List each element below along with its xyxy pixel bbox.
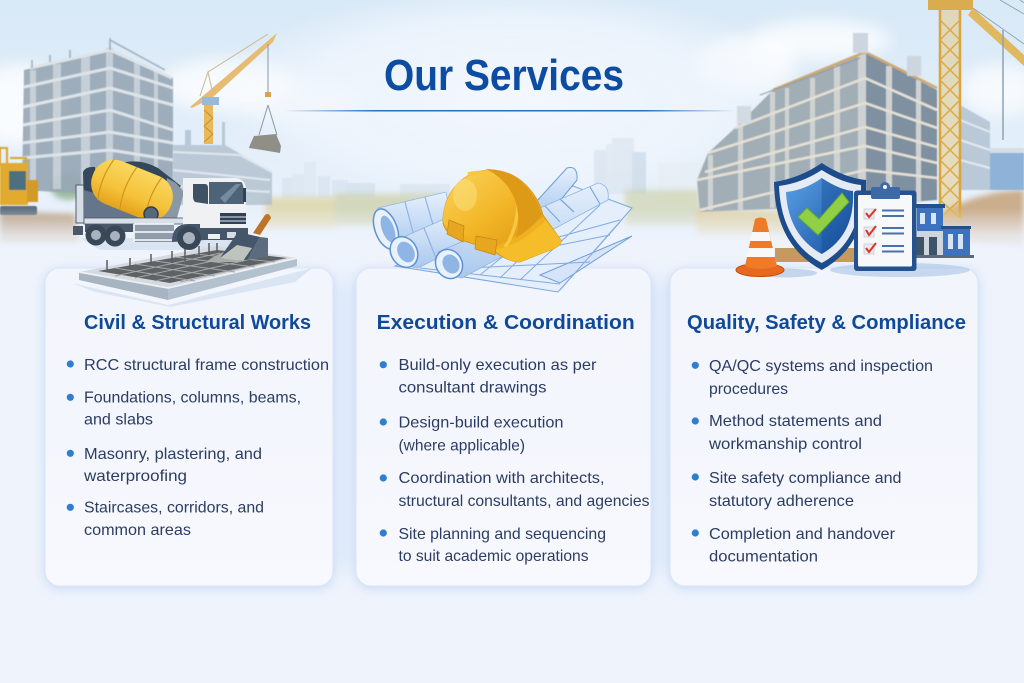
bullet list: Foundations, columns, beams, (84, 390, 301, 407)
page lower tint (0, 252, 1024, 683)
bullet list: Completion and handover (709, 526, 896, 543)
icon: rebar foundation slab with shovel (72, 214, 312, 307)
gap tint between cards (335, 280, 670, 570)
panel: Quality, Safety & Compliance (670, 268, 978, 586)
icon: traffic cone (736, 218, 817, 278)
heading: Quality, Safety & Compliance (687, 312, 966, 334)
bullet list: workmanship control (708, 436, 862, 453)
bullet list: Staircases, corridors, and (84, 500, 264, 517)
panel: Execution & Coordination (356, 268, 651, 586)
roll far top (535, 168, 577, 218)
clouds (0, 20, 1024, 145)
icon: concrete mixer truck (73, 153, 262, 250)
bullet list: Coordination with architects, (398, 470, 604, 487)
distant skyline (282, 138, 706, 203)
tower crane: left (190, 33, 281, 153)
bullet list: RCC structural frame construction (84, 357, 329, 374)
bullet list: common areas (84, 522, 191, 539)
bullet list: Masonry, plastering, and (84, 446, 262, 463)
title rule (285, 110, 735, 112)
building under construction: left (22, 38, 173, 195)
bullet list: Build-only execution as per (398, 357, 597, 374)
bullet list: waterproofing (83, 468, 187, 485)
icon: small school building (830, 204, 974, 277)
bullet list (692, 358, 933, 566)
bullet list: consultant drawings (398, 380, 546, 397)
bullet list: (where applicable) (398, 438, 525, 455)
yellow excavator: far left (0, 148, 38, 215)
title backdrop glow (212, 0, 812, 205)
bullet list: statutory adherence (709, 493, 854, 510)
icon: shield with check mark (774, 163, 866, 270)
bullet list: and slabs (84, 412, 153, 428)
bullet list: structural consultants, and agencies (398, 493, 650, 510)
distance fade into page (0, 208, 1024, 252)
bullet list (67, 357, 329, 539)
bullet list (380, 357, 650, 565)
heading: Execution & Coordination (377, 312, 635, 334)
bullet list: Design-build execution (398, 415, 564, 432)
panel: Civil & Structural Works (45, 268, 333, 586)
tower crane: right (928, 0, 1024, 220)
bullet list: Site planning and sequencing (398, 526, 606, 543)
mid-ground low building (173, 122, 272, 205)
roll left top (378, 192, 452, 250)
roll right long (438, 183, 608, 278)
bullet list: Method statements and (709, 413, 882, 430)
roll left mid (392, 212, 470, 268)
sandy ground band (0, 172, 1024, 248)
bullet list: procedures (709, 381, 788, 398)
title: Our Services (384, 51, 624, 100)
hard hat (443, 169, 561, 262)
heading: Civil & Structural Works (84, 312, 311, 334)
bullet list: QA/QC systems and inspection (709, 358, 933, 375)
bullet list: Site safety compliance and (709, 470, 902, 487)
bullet list: to suit academic operations (398, 548, 588, 565)
bullet list: documentation (709, 548, 818, 566)
icon: blueprints (368, 168, 632, 292)
wooden plank (775, 248, 855, 262)
icon: clipboard checklist (854, 182, 916, 271)
building under construction: right (697, 33, 1024, 212)
